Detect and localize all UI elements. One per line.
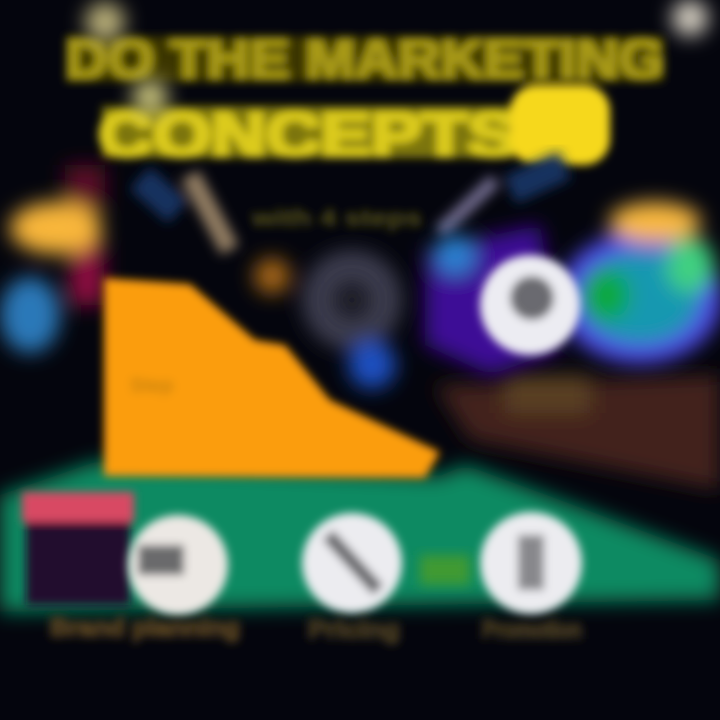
icon circle 2 bbox=[302, 513, 402, 613]
title bbox=[65, 27, 665, 170]
white icon circle top right bbox=[480, 255, 580, 355]
orange staircase panel: Step bbox=[130, 375, 173, 397]
left pointer stick bbox=[140, 175, 230, 250]
dark gear icon bbox=[254, 250, 402, 389]
character left bbox=[0, 165, 105, 353]
caption 2: Pricing bbox=[308, 614, 400, 644]
subtitle: with 4 steps bbox=[251, 205, 422, 232]
purple glow and globe group bbox=[425, 202, 720, 375]
green band bbox=[0, 462, 720, 612]
title: CONCEPTS bbox=[98, 101, 518, 170]
small green arrow bbox=[420, 555, 470, 585]
brown table bbox=[435, 375, 720, 490]
icon circle 3 bbox=[480, 512, 582, 614]
icon circle 1 bbox=[128, 515, 228, 615]
orange staircase panel bbox=[104, 278, 440, 478]
caption 3: Promotion bbox=[482, 614, 582, 644]
glowing title orbs bbox=[85, 0, 708, 115]
title: DO THE MARKETING bbox=[65, 27, 665, 90]
caption 1: Brand planning bbox=[50, 612, 240, 642]
maroon box bbox=[22, 492, 134, 605]
right pointer stick bbox=[440, 165, 565, 232]
